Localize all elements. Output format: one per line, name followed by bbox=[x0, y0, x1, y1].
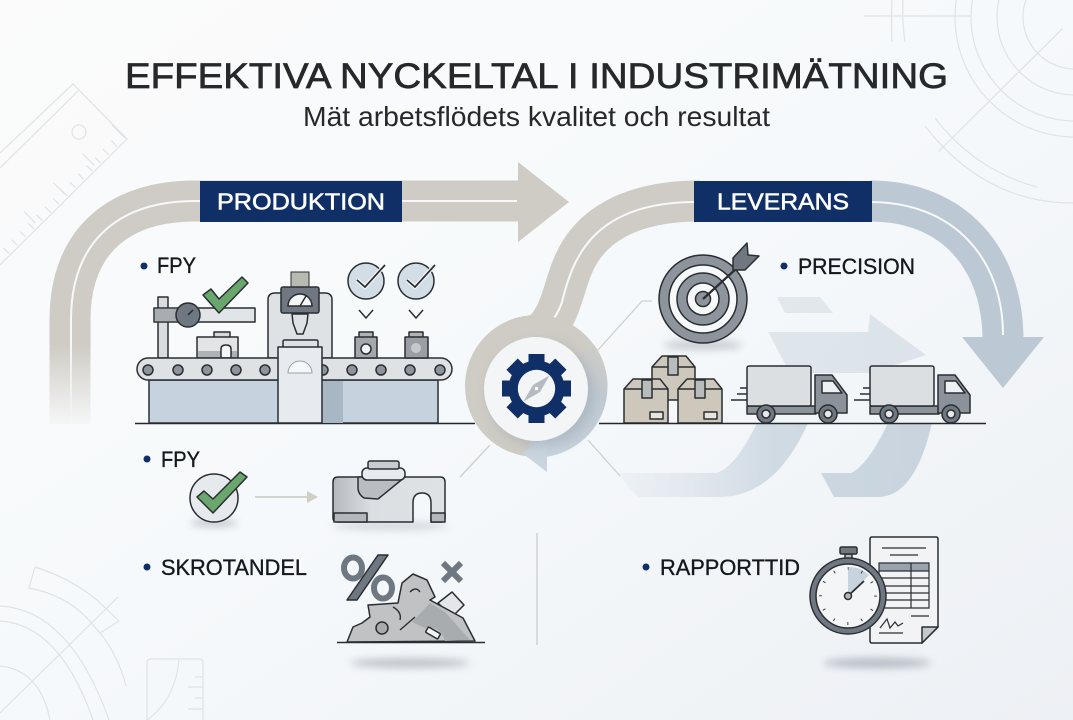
subtitle: Mät arbetsflödets kvalitet och resultat bbox=[303, 101, 770, 132]
label: FPY production bbox=[140, 253, 196, 278]
background chevrons: delivery flow bbox=[588, 297, 932, 497]
icon: stacked boxes bbox=[624, 356, 722, 423]
workpiece on belt bbox=[197, 332, 238, 358]
central housing bbox=[278, 340, 322, 423]
measuring stand bbox=[154, 297, 255, 358]
arrow: delivery flow blue section bbox=[870, 201, 1044, 388]
stopwatch bbox=[810, 547, 886, 634]
leader lines bbox=[460, 301, 652, 477]
quality checks bbox=[348, 263, 435, 318]
hub: gear and compass bbox=[484, 337, 594, 447]
icon: stopwatch and report bbox=[810, 537, 938, 668]
arrow: delivery flow tan section bbox=[525, 201, 700, 338]
arrow: production flow bbox=[70, 162, 569, 424]
icon: gear bbox=[502, 354, 571, 423]
label: precision: PRECISION bbox=[798, 254, 915, 279]
label: FPY part: FPY bbox=[161, 447, 200, 472]
label: skrotandel: SKROTANDEL bbox=[161, 555, 307, 580]
ground line bbox=[135, 422, 475, 424]
decoration: top-right blueprint arcs bbox=[864, 0, 1073, 203]
icon: check in circle bbox=[190, 472, 247, 527]
label: FPY part bbox=[144, 447, 200, 472]
decoration: left ruler bbox=[0, 84, 127, 265]
ground line right bbox=[599, 422, 986, 424]
arrow: check to part bbox=[255, 491, 318, 503]
icon: target bbox=[659, 243, 759, 350]
icon: green check bbox=[203, 277, 248, 313]
finished blocks bbox=[355, 332, 428, 358]
decoration: bottom-left protractor bbox=[0, 567, 203, 720]
report sheet bbox=[870, 537, 938, 643]
title: EFFEKTIVA NYCKELTAL I INDUSTRIMÄTNING bbox=[125, 57, 948, 96]
conveyor belt bbox=[137, 358, 452, 380]
banner: produktion: PRODUKTION bbox=[217, 188, 385, 214]
icon: machined part bbox=[332, 461, 448, 530]
banner: produktion bbox=[200, 181, 402, 222]
conveyor base bbox=[149, 380, 438, 423]
press machine bbox=[268, 272, 332, 358]
label: rapporttid: RAPPORTTID bbox=[660, 555, 800, 580]
ring around hub bbox=[476, 326, 597, 472]
icon: percent and scrap pile bbox=[337, 555, 485, 668]
icon: truck 1 bbox=[731, 366, 847, 423]
divider bbox=[536, 533, 538, 645]
banner: leverans: LEVERANS bbox=[717, 188, 849, 214]
icon: truck 2 bbox=[854, 366, 970, 423]
label: FPY production: FPY bbox=[157, 253, 196, 278]
production line illustration bbox=[135, 263, 475, 424]
banner: leverans bbox=[694, 181, 872, 222]
